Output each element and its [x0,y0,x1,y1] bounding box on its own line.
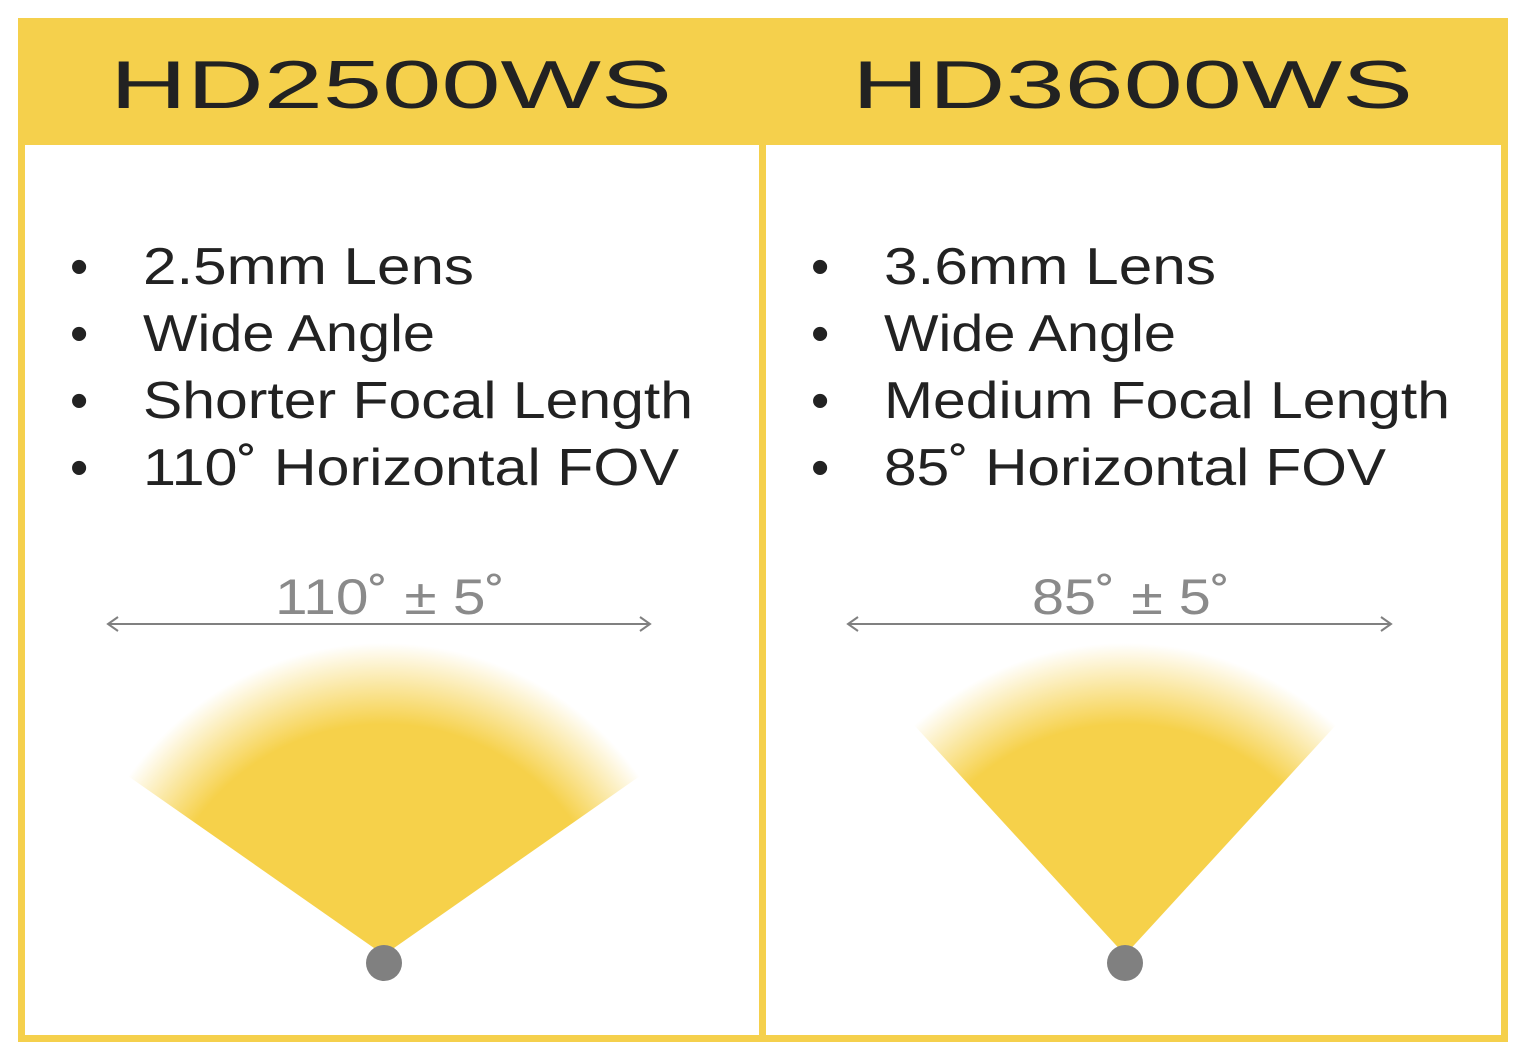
heading: HD3600WS: HD3600WS [852,47,1413,123]
bullet list: HD2500WS: Wide Angle [143,305,435,363]
bullet list: HD3600WS: 3.6mm Lens [884,238,1216,296]
bullet list: HD3600WS [811,238,1450,497]
bullet list: HD2500WS: 110˚ Horizontal FOV [143,439,679,497]
bullet list: HD2500WS: • [70,305,88,363]
fan: 85 degree FOV [914,643,1336,981]
FOV label 110: 110˚ ± 5˚ [275,569,505,625]
bullet list: HD3600WS: • [811,238,829,296]
bullet list: HD2500WS: • [70,439,88,497]
bullet list: HD2500WS: • [70,238,88,296]
bullet list: HD3600WS: Wide Angle [884,305,1176,363]
bullet list: HD3600WS: • [811,305,829,363]
bullet list: HD3600WS: • [811,372,829,430]
bullet list: HD2500WS [70,238,693,497]
bullet list: HD2500WS: Shorter Focal Length [143,372,693,430]
bullet list: HD2500WS: • [70,372,88,430]
arrow 110 [108,617,650,631]
arrow 85 [848,617,1391,631]
bullet list: HD3600WS: 85˚ Horizontal FOV [884,439,1386,497]
heading: HD2500WS: HD2500WS [110,47,672,123]
bullet list: HD3600WS: Medium Focal Length [884,372,1450,430]
fan: 110 degree FOV [128,642,640,981]
bullet list: HD3600WS: • [811,439,829,497]
bullet list: HD2500WS: 2.5mm Lens [143,238,474,296]
FOV label 85: 85˚ ± 5˚ [1032,569,1230,625]
